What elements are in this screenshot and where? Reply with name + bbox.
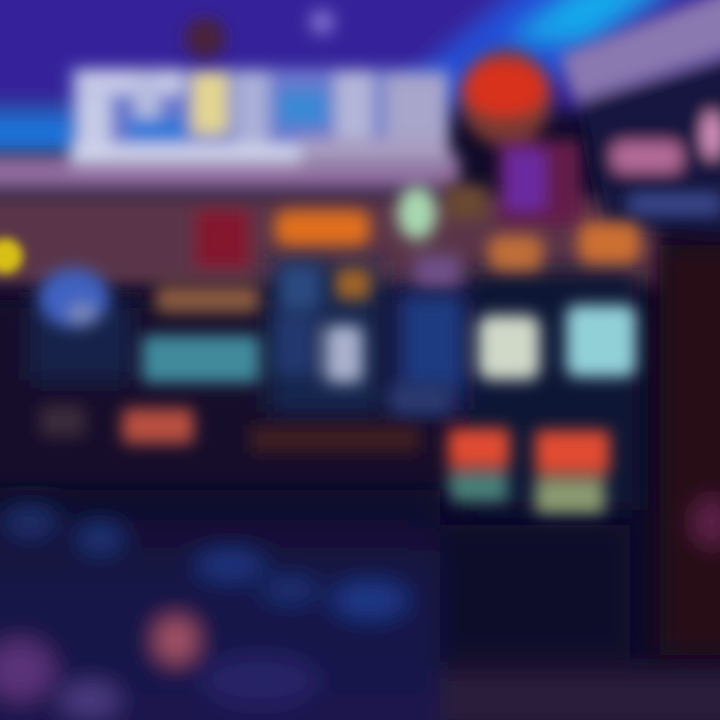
yellow light (0, 238, 23, 274)
orange top signs (155, 210, 640, 313)
red and green lower panels (40, 385, 610, 516)
ceiling background (0, 0, 720, 156)
dark red right wall (660, 245, 720, 655)
dark machine row (0, 262, 640, 510)
white venue sign (70, 68, 450, 166)
blue dome machine (38, 268, 110, 328)
carpet floor (0, 490, 720, 720)
top right canopy and sign (560, 0, 720, 240)
wall and ceiling band (0, 155, 660, 286)
pale green round light (397, 186, 460, 287)
red rooftop sign (445, 50, 582, 225)
figure above sign and ceiling light (185, 9, 335, 58)
machine screens (142, 265, 636, 385)
